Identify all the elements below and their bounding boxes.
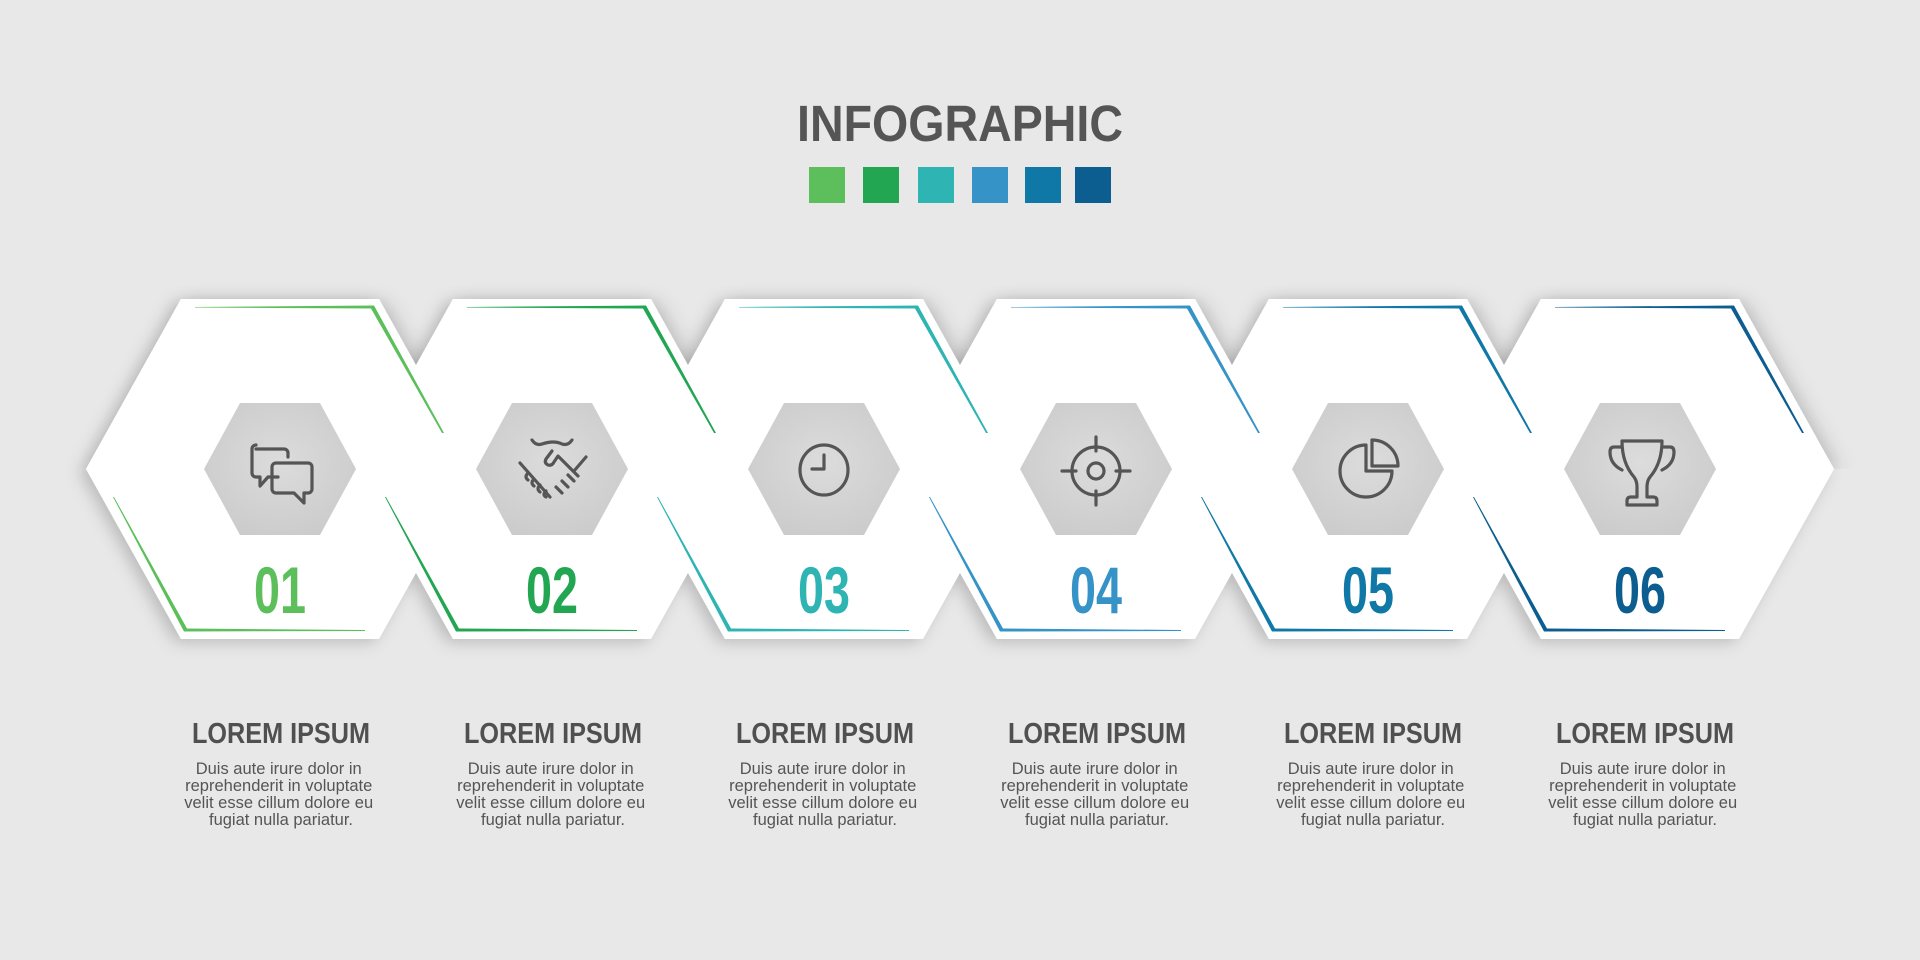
text block 05: Duis aute irure dolor in [1288,760,1454,778]
text block 06: Duis aute irure dolor in [1560,760,1726,778]
icon bg hex 01 [204,403,356,535]
panel: step 06 [1473,306,1804,632]
text block 06 [1548,718,1742,829]
text block 01: LOREM IPSUM [192,718,370,750]
accent lines 06 [1473,306,1804,632]
number 02: 02 [526,553,578,627]
text block 04: LOREM IPSUM [1008,718,1186,750]
text block 01: velit esse cillum dolore eu [184,794,373,812]
panel: step 03 [657,306,988,632]
text block 03: LOREM IPSUM [736,718,914,750]
icon bg hex 05 [1292,403,1444,535]
icon bg hex 02 [476,403,628,535]
text block 03: velit esse cillum dolore eu [728,794,917,812]
icon bg hex 06 [1564,403,1716,535]
text block 04: velit esse cillum dolore eu [1000,794,1189,812]
text block 03: Duis aute irure dolor in [740,760,906,778]
icon: pie chart [1340,440,1398,497]
text block 02: LOREM IPSUM [464,718,642,750]
number 04: 04 [1070,553,1122,627]
text block 01: fugiat nulla pariatur. [209,811,353,829]
text block 03: fugiat nulla pariatur. [753,811,897,829]
text block 04: Duis aute irure dolor in [1012,760,1178,778]
text block 05: velit esse cillum dolore eu [1276,794,1465,812]
text block 01: Duis aute irure dolor in [196,760,362,778]
text block 03 [728,718,922,829]
text block 04 [1000,718,1194,829]
icon bg hex 03 [748,403,900,535]
icon: target [1062,437,1130,505]
panel: step 05 [1201,306,1532,632]
hexagon chain base [86,299,1834,639]
accent lines 03 [657,306,988,632]
text block 01: reprehenderit in voluptate [185,777,372,795]
icon bg hex 04 [1020,403,1172,535]
text block 03: reprehenderit in voluptate [729,777,916,795]
text block 02 [456,718,650,829]
hexagon chain upper overlaps [86,299,1834,469]
accent lines 05 [1201,306,1532,632]
text block 05: LOREM IPSUM [1284,718,1462,750]
accent lines 02 [385,306,716,632]
icon: handshake [520,440,586,497]
text block 05: reprehenderit in voluptate [1277,777,1464,795]
accent lines 01 [113,306,444,632]
text block 02: reprehenderit in voluptate [457,777,644,795]
text block 06: velit esse cillum dolore eu [1548,794,1737,812]
icon: trophy [1610,441,1674,505]
text block 06: reprehenderit in voluptate [1549,777,1736,795]
number 05: 05 [1342,553,1394,627]
number 06: 06 [1614,553,1666,627]
text block 02: fugiat nulla pariatur. [481,811,625,829]
accent lines 04 [929,306,1260,632]
text block 04: fugiat nulla pariatur. [1025,811,1169,829]
text block 04: reprehenderit in voluptate [1001,777,1188,795]
panel: step 04 [929,306,1260,632]
text block 06: fugiat nulla pariatur. [1573,811,1717,829]
text block 02: Duis aute irure dolor in [468,760,634,778]
text block 05: fugiat nulla pariatur. [1301,811,1445,829]
text block 01 [184,718,378,829]
icon: chat bubbles [252,445,312,503]
text block 02: velit esse cillum dolore eu [456,794,645,812]
number 03: 03 [798,553,850,627]
title: INFOGRAPHIC [797,95,1123,152]
number 01: 01 [254,553,306,627]
panel: step 01 [113,306,444,632]
text block 05 [1276,718,1470,829]
colour legend squares [809,167,1111,203]
icon: clock [800,445,848,495]
panel: step 02 [385,306,716,632]
text block 06: LOREM IPSUM [1556,718,1734,750]
